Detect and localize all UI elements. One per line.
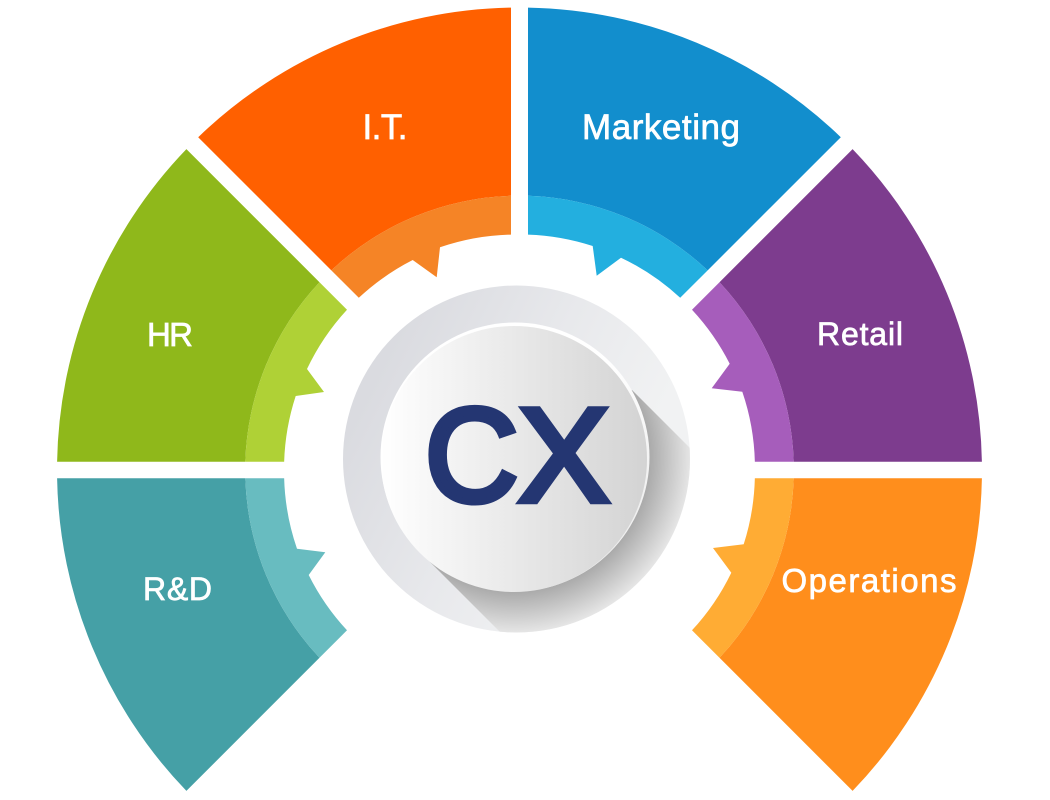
- Retail label: Retail: [817, 316, 903, 352]
- R&D inner gear band: [245, 478, 347, 658]
- CX text: [425, 380, 609, 530]
- sector: HR: [57, 149, 347, 462]
- sector: I.T.: [198, 8, 511, 298]
- R&D outer band: [57, 478, 319, 791]
- sector: R&D: [57, 478, 347, 791]
- Operations inner gear band: [692, 478, 794, 658]
- I.T. inner gear band: [331, 196, 511, 298]
- long drop shadow: [430, 390, 690, 632]
- HR inner gear band: [245, 282, 347, 462]
- Operations outer band: [720, 478, 982, 791]
- Marketing outer band: [528, 8, 841, 270]
- HR label: HR: [147, 316, 193, 353]
- button face: [381, 326, 647, 592]
- Marketing inner gear band: [528, 196, 708, 298]
- hub backing circle: [343, 286, 690, 632]
- sector: Operations: [692, 478, 982, 791]
- R&D label: R&D: [143, 571, 212, 607]
- Retail inner gear band: [692, 282, 794, 462]
- button rim: [380, 322, 650, 592]
- HR outer band: [57, 149, 319, 462]
- I.T. label: I.T.: [362, 108, 408, 147]
- central CX hub: [343, 286, 690, 632]
- Marketing label: Marketing: [582, 108, 740, 147]
- sector: Retail: [692, 149, 982, 462]
- letter X: X: [518, 381, 609, 530]
- Operations label: Operations: [782, 562, 956, 599]
- I.T. outer band: [198, 8, 511, 270]
- sector: Marketing: [528, 8, 841, 298]
- letter C: C: [425, 380, 518, 529]
- Retail outer band: [720, 149, 982, 462]
